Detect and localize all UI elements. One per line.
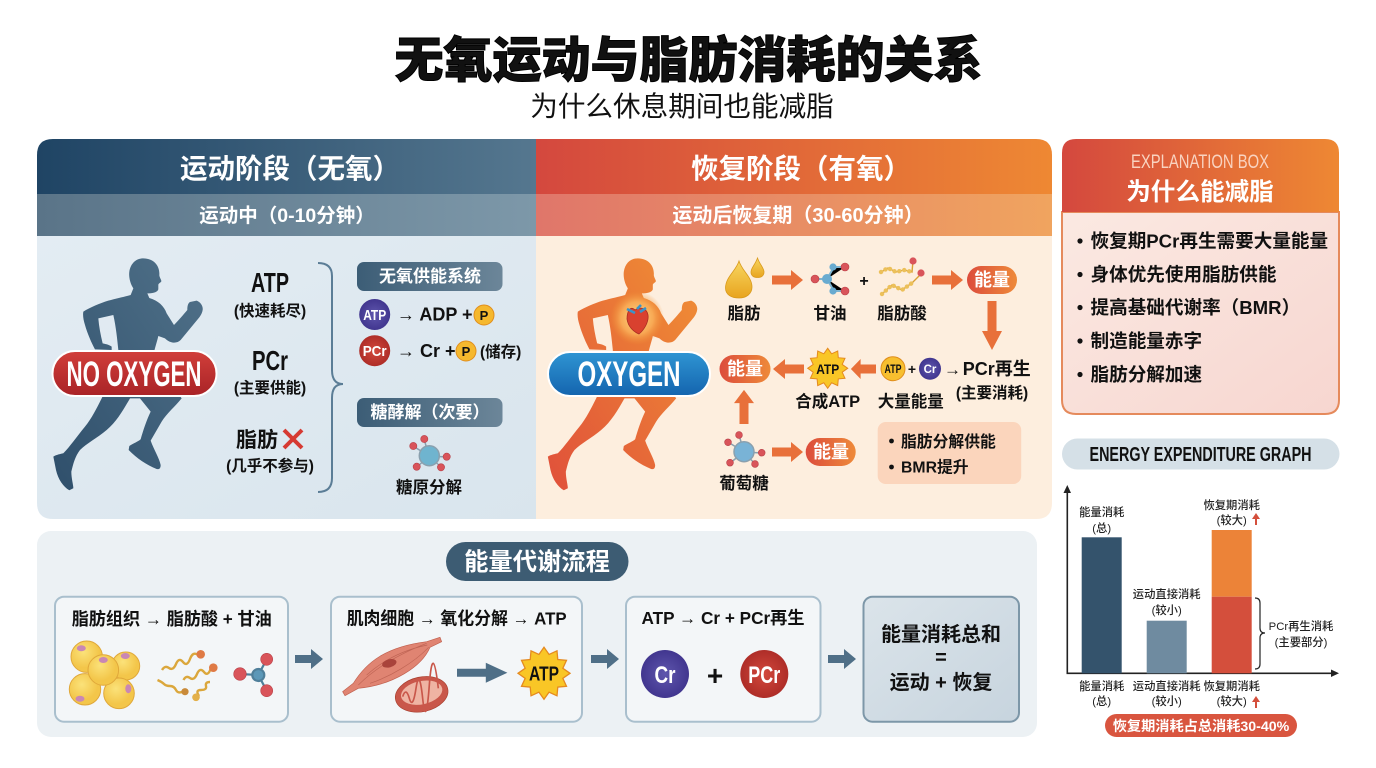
tag: anaerobic system [357, 262, 502, 291]
arrow: up [734, 390, 754, 424]
icon: PCr circle: PCr [748, 662, 780, 689]
badge: no oxygen [52, 351, 216, 396]
panel: explanation box [1062, 139, 1339, 414]
pill: energy bottom [806, 438, 856, 466]
bar: recovery PCr [1212, 597, 1252, 673]
lower axis labels: (总) [1092, 694, 1111, 708]
badge: no oxygen: NO OXYGEN [66, 355, 202, 394]
equation: PCr to Cr: → Cr + [397, 341, 456, 361]
text: PCr regeneration: → [944, 360, 961, 379]
step: fat tissue [55, 597, 288, 722]
header: recovery phase [536, 139, 1052, 194]
heading pill: 能量代谢流程 [464, 549, 610, 576]
icon: dark runner silhouette [53, 258, 203, 490]
header: exercise phase: 运动阶段（无氧） [180, 153, 400, 184]
bar: recovery upper [1212, 530, 1252, 597]
equation: ATP to ADP [359, 299, 494, 330]
icon: orange runner silhouette [548, 258, 697, 490]
equation: PCr to Cr [359, 335, 521, 366]
text: PCr [234, 345, 306, 397]
upper labels [1079, 498, 1260, 617]
title: 无氧运动与脂肪消耗的关系 [394, 34, 983, 88]
text: PCr regeneration: (主要消耗) [956, 384, 1028, 402]
icon: fatty acid chains [881, 257, 925, 294]
arrow [772, 270, 803, 290]
upper labels: (较小) [1152, 603, 1182, 617]
callout: fat breakdown and BMR [878, 422, 1021, 484]
equation: ATP plus Cr: + [908, 361, 916, 377]
explanation header: EXPLANATION BOX [1131, 152, 1269, 173]
icon: ATP star: ATP [816, 361, 839, 377]
icon: glycerol [811, 263, 849, 295]
explanation bullet list: 制造能量赤字 [1090, 330, 1202, 352]
panel: exercise phase background [37, 236, 536, 519]
plus sign: + [859, 273, 869, 290]
arrow [932, 270, 963, 290]
panel: recovery phase background [536, 236, 1052, 519]
lower axis labels: (较大) [1217, 694, 1247, 708]
upper labels: 运动直接消耗 [1133, 587, 1201, 601]
subheader: exercise phase [37, 194, 536, 236]
badge: oxygen [548, 352, 710, 396]
panel: energy metabolism flow [37, 531, 1037, 737]
bar: direct exercise [1147, 621, 1187, 673]
equation: PCr to Cr: (储存) [480, 343, 521, 361]
pill: energy top [967, 266, 1017, 294]
step: muscle cell [331, 597, 582, 722]
label: fat: 脂肪 [728, 303, 760, 323]
lower axis labels [1079, 679, 1260, 708]
subtitle: 为什么休息期间也能减脂 [530, 91, 834, 122]
result box: total energy: = [935, 647, 947, 669]
explanation header: 为什么能减脂 [1126, 178, 1274, 206]
plus sign: + [707, 660, 723, 691]
pill: energy bottom: 能量 [813, 442, 849, 462]
arrow [457, 663, 507, 683]
icon: Cr circle: Cr [654, 662, 676, 689]
explanation bullet list: 恢复期PCr再生需要大量能量 [1090, 230, 1328, 252]
tag: glycolysis: 糖酵解（次要） [370, 402, 490, 422]
arrow: left [773, 359, 804, 379]
header: recovery phase: 恢复阶段（有氧） [691, 153, 911, 184]
subheader: recovery phase [536, 194, 1052, 236]
callout: recovery share [1105, 714, 1297, 737]
tag: glycolysis [357, 398, 502, 427]
icon: fatty acid squiggles [158, 650, 218, 701]
result box: total energy: 能量消耗总和 [881, 623, 1001, 646]
text: fat not involved: 脂肪 [236, 429, 278, 452]
equation: PCr to Cr: PCr [363, 343, 387, 360]
icon: glycogen molecule [410, 435, 450, 471]
text: PCr: PCr [252, 345, 288, 376]
heading: energy expenditure graph [1062, 438, 1340, 470]
equation: ATP plus Cr: Cr [924, 364, 937, 376]
bar chart [1064, 485, 1339, 708]
icon: ATP star [808, 348, 848, 388]
label: synthesize ATP: 合成ATP [795, 391, 860, 411]
upper labels: (较大) [1217, 513, 1247, 527]
text: PCr regeneration: PCr再生 [963, 359, 1031, 379]
icon: fat drops [726, 258, 764, 298]
text: ATP: (快速耗尽) [234, 302, 306, 320]
subheader: exercise phase: 运动中（0-10分钟） [199, 205, 375, 227]
step: fat tissue: 脂肪组织 → 脂肪酸 + 甘油 [72, 609, 272, 629]
text: fat not involved: (几乎不参与) [226, 456, 314, 475]
lower axis labels: 运动直接消耗 [1133, 679, 1201, 693]
icon: muscle and mitochondrion [343, 637, 451, 717]
explanation bullet list: 身体优先使用脂肪供能 [1090, 264, 1277, 285]
panel: phases [37, 139, 1052, 519]
brace: PCr share [1255, 598, 1265, 669]
label: large energy: 大量能量 [878, 392, 944, 411]
pill: energy top: 能量 [974, 270, 1010, 290]
equation: PCr to Cr: P [462, 344, 471, 359]
icon: PCr circle [740, 650, 788, 698]
lower axis labels: 能量消耗 [1079, 679, 1124, 693]
text: fat not involved [226, 429, 314, 475]
icon: fat cells [69, 641, 140, 709]
result box: total energy: 运动 + 恢复 [890, 671, 992, 694]
result box: total energy [864, 597, 1019, 722]
equation: ATP plus Cr: ATP [884, 364, 902, 376]
label: fatty acid: 脂肪酸 [877, 303, 927, 323]
callout: fat breakdown and BMR: 脂肪分解供能 [901, 432, 996, 451]
equation: ATP to ADP: P [480, 308, 489, 323]
arrow [591, 649, 619, 669]
explanation bullet list: 提高基础代谢率（BMR） [1090, 297, 1300, 318]
arrow [295, 649, 323, 669]
subheader: recovery phase: 运动后恢复期（30-60分钟） [672, 204, 924, 227]
text: PCr: (主要供能) [234, 378, 306, 397]
icon: glucose molecule [725, 432, 765, 467]
label: PCr regeneration cost: PCr再生消耗 [1269, 619, 1333, 633]
icon: glycerol molecule [234, 653, 273, 697]
icon: heart [610, 291, 664, 345]
explanation header [1062, 139, 1339, 212]
upper labels: 恢复期消耗 [1203, 498, 1260, 512]
text: ATP: ATP [251, 267, 289, 298]
header: exercise phase [37, 139, 536, 194]
text: ATP [234, 267, 306, 320]
bar: total [1082, 537, 1122, 673]
axes [1064, 485, 1339, 677]
upper labels: 能量消耗 [1079, 505, 1124, 519]
arrow: left [851, 359, 876, 379]
badge: oxygen: OXYGEN [578, 355, 680, 394]
label: PCr regeneration cost [1269, 619, 1333, 649]
label: PCr regeneration cost: (主要部分) [1275, 635, 1328, 649]
icon: ATP star: ATP [529, 664, 559, 686]
icon: red cross [284, 430, 302, 448]
equation: ATP to ADP: → ADP + [397, 304, 473, 324]
lower axis labels: (较小) [1152, 694, 1182, 708]
arrow: down [982, 301, 1002, 350]
step: muscle cell: 肌肉细胞 → 氧化分解 → ATP [347, 607, 567, 628]
label: glycerol: 甘油 [814, 304, 846, 323]
lower axis labels: 恢复期消耗 [1203, 679, 1260, 693]
step: PCr regeneration: ATP → Cr + PCr再生 [642, 608, 804, 628]
label: glycogenolysis: 糖原分解 [396, 477, 462, 497]
step: PCr regeneration [626, 597, 820, 722]
arrow [772, 442, 803, 462]
label: glucose: 葡萄糖 [719, 473, 769, 493]
explanation bullet list: 脂肪分解加速 [1090, 364, 1202, 385]
equation: ATP plus Cr [881, 357, 941, 381]
icon: Cr circle [641, 650, 689, 698]
arrow [828, 649, 856, 669]
upper labels: (总) [1092, 521, 1111, 535]
callout: recovery share: 恢复期消耗占总消耗30-40% [1113, 718, 1290, 735]
icon: ATP star [518, 647, 570, 699]
heading pill [446, 542, 628, 581]
brace [318, 263, 343, 492]
equation: ATP to ADP: ATP [363, 307, 386, 324]
callout: fat breakdown and BMR: BMR提升 [901, 458, 969, 476]
pill: energy middle: 能量 [727, 359, 763, 379]
tag: anaerobic system: 无氧供能系统 [379, 266, 481, 286]
text: PCr regeneration [944, 359, 1031, 402]
pill: energy middle [720, 355, 770, 383]
explanation bullet list [1077, 230, 1328, 385]
